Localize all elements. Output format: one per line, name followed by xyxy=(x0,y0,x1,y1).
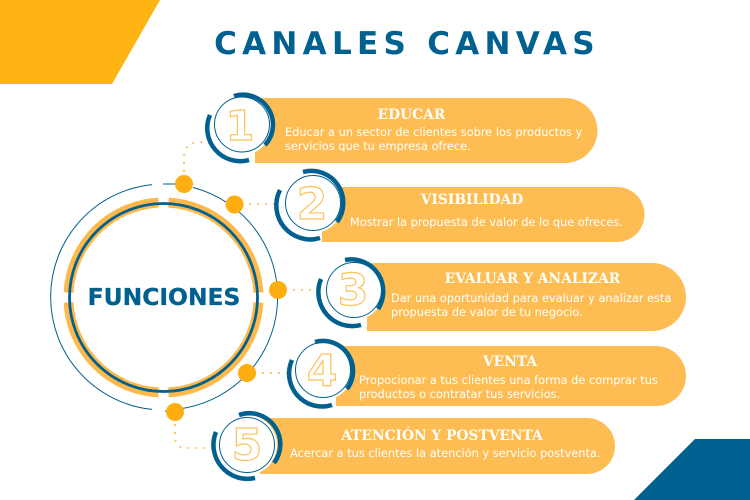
item 3: evaluar y analizar: Dar una oportunidad para evaluar y analizar esta xyxy=(391,291,671,305)
central diagram: funciones xyxy=(51,184,278,411)
ring label: FUNCIONES xyxy=(88,283,240,311)
top-left corner shape xyxy=(0,0,160,84)
item 3: evaluar y analizar: propuesta de valor de tu negocio. xyxy=(391,305,583,319)
badge 1 xyxy=(207,95,273,161)
blue ring xyxy=(70,204,258,392)
banner 4 xyxy=(336,346,686,406)
title: CANALES CANVAS xyxy=(214,26,600,62)
badge 3: 3 xyxy=(338,265,368,316)
item 5: atencion y postventa: Acercar a tus clientes la atención y servicio postventa. xyxy=(290,446,600,460)
item 4: venta: Propocionar a tus clientes una forma de comprar tus xyxy=(359,373,658,387)
connector dots xyxy=(166,142,320,448)
item 4: venta: VENTA xyxy=(482,354,537,370)
badge 5: 5 xyxy=(232,420,262,471)
item 1: educar: Educar a un sector de clientes sobre los productos y xyxy=(285,125,583,139)
item 3: evaluar y analizar xyxy=(318,259,686,331)
item 2: visibilidad: VISIBILIDAD xyxy=(420,192,523,208)
badge 2 xyxy=(276,171,343,239)
banner 1 xyxy=(255,98,598,163)
badge 5 xyxy=(213,413,280,479)
item 3: evaluar y analizar: EVALUAR Y ANALIZAR xyxy=(445,271,621,287)
banner 3 xyxy=(367,263,686,331)
banner 5 xyxy=(260,418,615,474)
item 2: visibilidad xyxy=(276,171,644,242)
badge 4: 4 xyxy=(307,346,337,397)
orange segmented ring xyxy=(69,203,258,392)
badge 3 xyxy=(318,259,384,326)
banner 2 xyxy=(322,187,644,242)
item 4: venta xyxy=(289,340,686,407)
badge 1: 1 xyxy=(226,102,254,150)
item 5: atencion y postventa xyxy=(213,413,615,479)
item 1: educar: servicios que tu empresa ofrece. xyxy=(285,139,471,153)
item 1: educar xyxy=(207,95,597,163)
outer thin ring xyxy=(51,184,278,411)
bottom-right corner shape xyxy=(634,439,750,500)
item 1: educar: EDUCAR xyxy=(378,107,446,123)
item 5: atencion y postventa: ATENCIÓN Y POSTVENTA xyxy=(340,427,543,444)
item 4: venta: productos o contratar tus servicios. xyxy=(359,387,560,401)
badge 2: 2 xyxy=(297,179,327,230)
item 2: visibilidad: Mostrar la propuesta de valor de lo que ofreces. xyxy=(350,215,623,229)
badge 4 xyxy=(289,340,353,407)
